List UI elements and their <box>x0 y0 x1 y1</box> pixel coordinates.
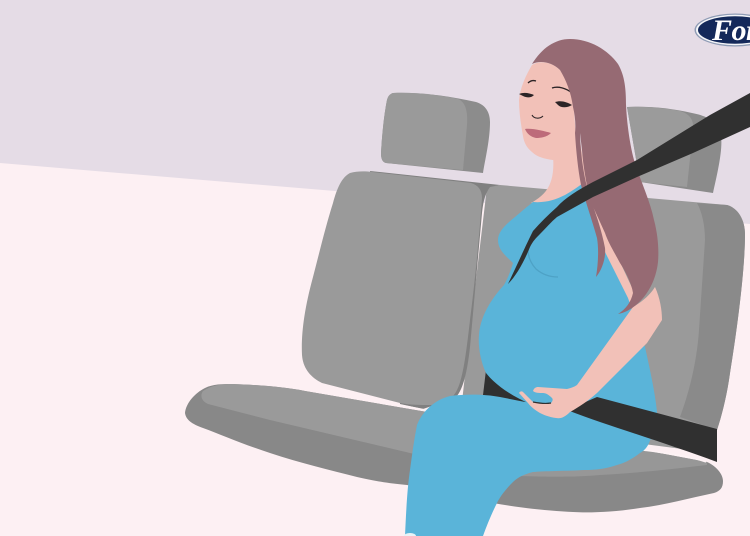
lips <box>525 129 551 138</box>
belt sliver inside hand <box>533 402 551 403</box>
lap belt: right piece <box>567 397 717 462</box>
dress: legs and lap <box>405 395 652 536</box>
dress: torso and belly <box>479 183 657 440</box>
brow: right <box>552 87 572 93</box>
shoulder belt <box>508 93 750 284</box>
eye: left <box>519 93 534 97</box>
lap belt: left piece behind belly <box>483 370 530 405</box>
eye: right <box>555 101 572 107</box>
headrest: left <box>381 93 490 173</box>
cushion top face: left <box>201 384 440 460</box>
seat back side panel <box>680 203 745 430</box>
arm and hand <box>519 287 662 418</box>
hem highlight <box>404 533 416 536</box>
background: pink floor <box>0 163 750 536</box>
skin: neck and back behind hair <box>531 130 634 312</box>
seat back: left <box>302 171 482 405</box>
seat cushion <box>185 384 723 512</box>
nose <box>532 115 543 118</box>
seat back: right <box>460 185 745 450</box>
hair: front strand <box>575 133 605 277</box>
dress: bust crease <box>528 235 558 277</box>
headrest: right <box>627 107 721 193</box>
cushion top face: right <box>500 440 707 477</box>
brow: left <box>528 81 536 83</box>
seat gap highlights <box>400 405 706 462</box>
face <box>519 62 576 162</box>
seat back: left shadow gap <box>370 171 500 409</box>
icon: Ford logo <box>694 14 750 47</box>
hair <box>532 39 658 314</box>
